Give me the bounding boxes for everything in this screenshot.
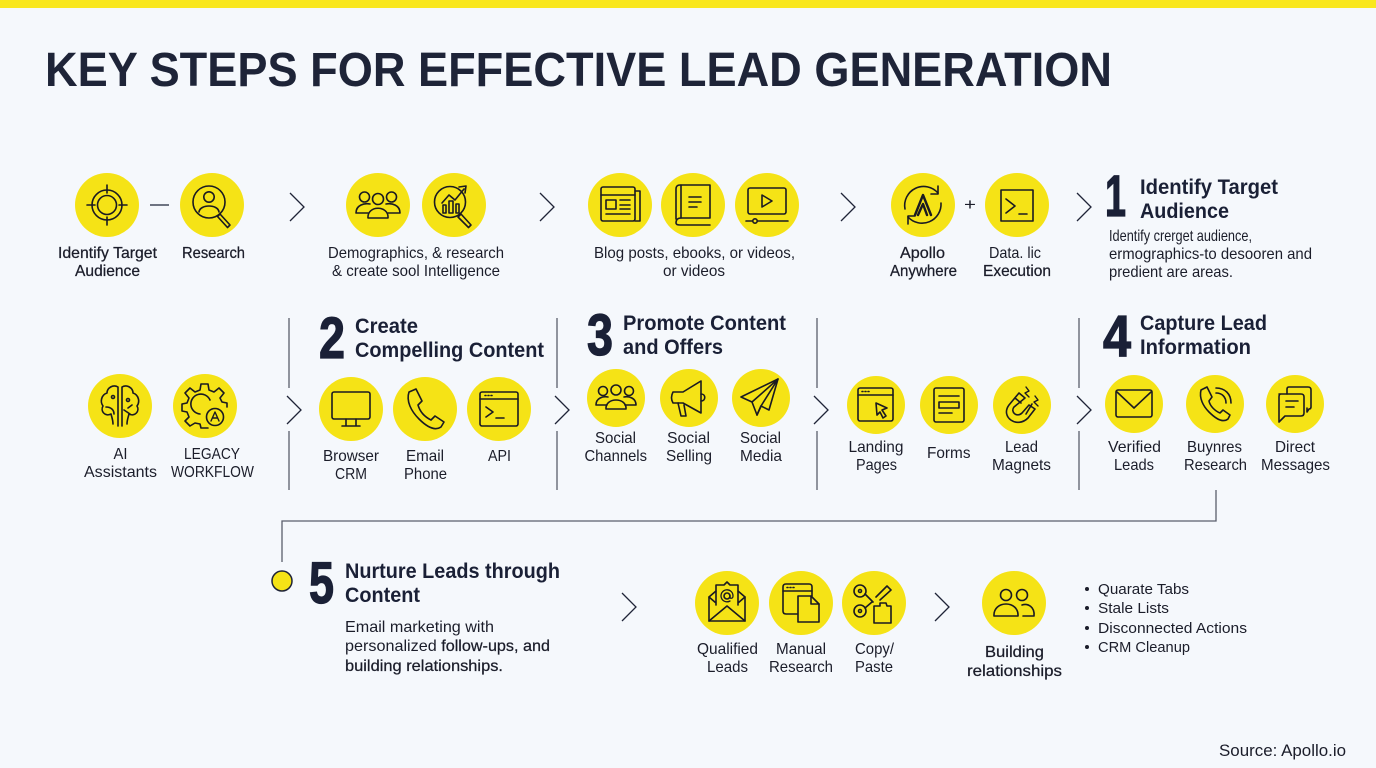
social channels item: Social: [595, 430, 636, 447]
arrow: [935, 593, 949, 621]
icon: book: [676, 185, 710, 225]
icon: envelope: [1116, 390, 1152, 417]
icon: people group: [596, 385, 636, 409]
icon: megaphone: [672, 381, 705, 416]
step 5 block: Nurture Leads through: [345, 559, 560, 583]
row 1: demographics item: [328, 173, 504, 280]
verified leads item: Verified: [1108, 439, 1161, 456]
icon: magnifier with person: [193, 186, 230, 228]
step 2 heading: Compelling Content: [355, 338, 544, 362]
icon: magnet: [1006, 387, 1038, 422]
qualified leads item: Qualified: [697, 641, 758, 658]
bullet list: Quarate Tabs: [1098, 581, 1189, 598]
step 4 heading: [1103, 304, 1267, 369]
step 3 heading: Promote Content: [623, 311, 786, 335]
building relationships item: relationships: [967, 663, 1062, 680]
row 2: AI assistants item: Assistants: [84, 464, 157, 481]
divider and arrow: [287, 318, 301, 490]
arrow: [841, 193, 855, 221]
icon: paper plane: [741, 379, 778, 415]
divider and arrow: [814, 318, 828, 490]
row 2: legacy workflow item: WORKFLOW: [171, 464, 255, 481]
browser CRM item: Browser: [323, 448, 380, 465]
step 5 block: [309, 551, 560, 675]
social media item: [732, 369, 790, 465]
step 4 heading: 4: [1103, 304, 1131, 369]
row 1: identify target audience item: [58, 173, 158, 280]
icon: open envelope with at sign: [709, 582, 745, 621]
step 5 block: building relationships.: [345, 658, 503, 675]
row 1: content formats item: [588, 173, 799, 280]
forms item: [920, 376, 978, 462]
row 2: AI assistants item: [84, 374, 157, 481]
step 3 heading: [587, 303, 786, 368]
step 2 heading: [319, 306, 544, 371]
arrow: [540, 193, 554, 221]
email phone item: Phone: [404, 466, 447, 483]
icon: browser with cursor: [858, 388, 893, 421]
dash connector: [150, 204, 169, 206]
buyer research item: Buynres: [1187, 439, 1242, 456]
building relationships item: [967, 571, 1062, 680]
step 3 heading: and Offers: [623, 335, 723, 359]
row 1: data execution item: Execution: [983, 263, 1051, 280]
forms item: Forms: [927, 445, 970, 462]
qualified leads item: Leads: [707, 659, 748, 676]
row 1: demographics item: Demographics, & research: [328, 245, 504, 262]
step 5 block: Content: [345, 583, 420, 607]
manual research item: [769, 571, 833, 676]
arrow: [622, 593, 636, 621]
row 2: legacy workflow item: LEGACY: [184, 446, 240, 463]
lead magnets item: Magnets: [992, 457, 1051, 474]
social selling item: Selling: [666, 448, 712, 465]
step 1 block: Identify Target: [1140, 175, 1278, 199]
row 1: data execution item: [983, 173, 1051, 280]
icon: copied documents: [783, 584, 819, 622]
step 3 heading: 3: [587, 303, 613, 368]
row 1: content formats item: Blog posts, ebooks, or videos,: [594, 245, 795, 262]
browser CRM item: CRM: [335, 466, 367, 483]
direct messages item: [1261, 375, 1330, 474]
copy paste item: Copy/: [855, 641, 895, 658]
step 5 block: 5: [309, 551, 334, 616]
source note: Source: Apollo.io: [1219, 741, 1346, 760]
direct messages item: Messages: [1261, 457, 1330, 474]
manual research item: Research: [769, 659, 833, 676]
lead magnets item: [992, 376, 1051, 474]
icon: monitor: [332, 392, 370, 426]
bullet list: Disconnected Actions: [1098, 620, 1247, 637]
icon circle: analytics: [422, 173, 486, 237]
step 1 block: 1: [1105, 164, 1126, 229]
buyer research item: Research: [1184, 457, 1247, 474]
arrow: [1077, 193, 1091, 221]
icon: phone call: [1200, 387, 1231, 421]
step 1 block: [1105, 164, 1312, 281]
icon: telephone: [408, 389, 444, 429]
row 1: demographics item: & create sool Intelligence: [332, 263, 500, 280]
icon: terminal window: [480, 392, 518, 426]
social selling item: [660, 369, 718, 465]
icon: apollo logo with cycle arrows: [905, 186, 941, 224]
bullet list: CRM Cleanup: [1098, 639, 1190, 656]
row 1: identify target audience item: Audience: [75, 263, 140, 280]
social media item: Media: [740, 448, 782, 465]
icon: form: [934, 388, 964, 422]
social channels item: Channels: [584, 448, 647, 465]
step 1 block: Identify crerget audience,: [1109, 228, 1252, 245]
icon: scissors and clipboard: [854, 585, 891, 623]
icon: gear with A badge: [182, 384, 227, 428]
social selling item: Social: [667, 430, 710, 447]
row 1: data execution item: Data. lic: [989, 245, 1041, 262]
row 2: legacy workflow item: [171, 374, 255, 481]
verified leads item: [1105, 375, 1163, 474]
icon: target: [87, 185, 127, 225]
row 1: content formats item: or videos: [663, 263, 725, 280]
lead magnets item: Lead: [1005, 439, 1038, 456]
row 1: research item: [180, 173, 245, 262]
step 5 block: Email marketing with: [345, 619, 494, 636]
verified leads item: Leads: [1114, 457, 1154, 474]
direct messages item: Direct: [1275, 439, 1316, 456]
arrow: [290, 193, 304, 221]
email phone item: Email: [406, 448, 444, 465]
plus sign: +: [964, 195, 976, 214]
manual research item: Manual: [776, 641, 826, 658]
icon: people group: [356, 192, 400, 218]
API item: API: [488, 448, 511, 465]
icon: video player: [746, 188, 788, 223]
icon: brain: [101, 386, 139, 426]
landing pages item: [847, 376, 905, 474]
icon: terminal: [1001, 190, 1033, 221]
building relationships item: Building: [985, 644, 1044, 661]
landing pages item: Pages: [856, 457, 897, 474]
row 2: AI assistants item: AI: [114, 446, 128, 463]
row 1: apollo anywhere item: Anywhere: [890, 263, 957, 280]
step 4 heading: Capture Lead: [1140, 311, 1267, 335]
social media item: Social: [740, 430, 781, 447]
browser CRM item: [319, 377, 383, 483]
step 1 block: Audience: [1140, 199, 1229, 223]
social channels item: [584, 369, 647, 465]
divider and arrow: [555, 318, 569, 490]
step 1 block: ermographics-to desooren and: [1109, 246, 1312, 263]
step 2 heading: Create: [355, 314, 418, 338]
qualified leads item: [695, 571, 759, 676]
step 2 heading: 2: [319, 306, 345, 371]
row 1: identify target audience item: Identify Target: [58, 245, 158, 262]
step 1 block: predient are areas.: [1109, 264, 1233, 281]
bullet list: [1085, 581, 1247, 656]
step 4 heading: Information: [1140, 335, 1251, 359]
landing pages item: Landing: [848, 439, 904, 456]
divider and arrow: [1077, 318, 1091, 490]
connector from step 4 to step 5: [272, 490, 1216, 591]
title: KEY STEPS FOR EFFECTIVE LEAD GENERATION: [45, 44, 1112, 97]
row 1: apollo anywhere item: [890, 173, 957, 280]
step 5 block: personalized follow-ups, and: [345, 638, 550, 655]
email phone item: [393, 377, 457, 483]
bullet list: Stale Lists: [1098, 600, 1169, 617]
copy paste item: Paste: [855, 659, 893, 676]
row 1: research item: Research: [182, 245, 245, 262]
top accent bar: [0, 0, 1376, 8]
API item: [467, 377, 531, 465]
icon: two people: [994, 590, 1034, 616]
row 1: apollo anywhere item: Apollo: [900, 245, 945, 262]
icon: chat bubbles: [1279, 387, 1311, 422]
buyer research item: [1184, 375, 1247, 474]
copy paste item: [842, 571, 906, 676]
icon: web article: [601, 187, 640, 221]
